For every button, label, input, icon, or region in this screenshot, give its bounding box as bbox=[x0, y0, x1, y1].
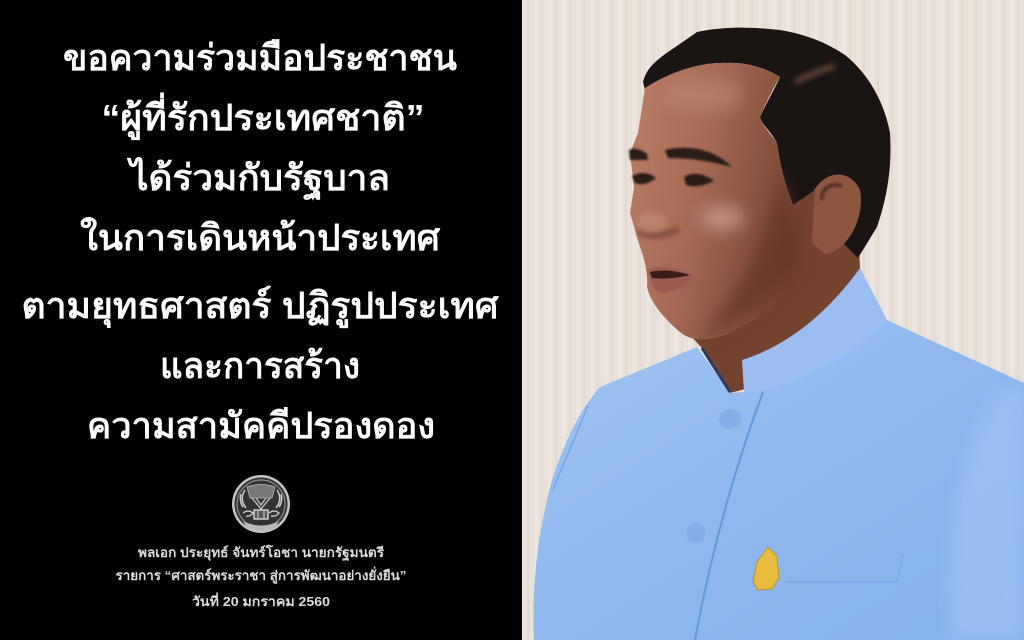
headline text: ในการเดินหน้าประเทศ bbox=[80, 216, 441, 258]
neck bbox=[690, 225, 868, 393]
headline text: และการสร้าง bbox=[160, 345, 360, 386]
ear bbox=[808, 174, 861, 254]
nose shadow bbox=[638, 230, 678, 236]
caption text: รายการ “ศาสตร์พระราชา สู่การพัฒนาอย่างยั่งยืน” bbox=[116, 566, 407, 584]
collar neck shadow line bbox=[702, 348, 730, 392]
hair bbox=[643, 28, 890, 258]
hair thin streak bbox=[795, 66, 835, 82]
headline text: “ผู้ที่รักประเทศชาติ” bbox=[102, 92, 424, 141]
icon: government emblem seal bbox=[232, 475, 290, 533]
right photo panel background bbox=[522, 0, 1024, 640]
left black panel bbox=[0, 0, 522, 640]
pocket bbox=[785, 555, 903, 582]
headline text: ความสามัคคีปรองดอง bbox=[87, 405, 435, 446]
headline text: ได้ร่วมกับรัฐบาล bbox=[126, 156, 390, 201]
gold pin badge bbox=[753, 547, 779, 590]
jacket button upper bbox=[719, 409, 741, 429]
jacket button lower bbox=[686, 523, 706, 543]
face shadow side bbox=[700, 170, 801, 340]
caption text bbox=[116, 544, 407, 609]
jacket collar bbox=[742, 268, 887, 392]
face highlight forehead bbox=[667, 79, 743, 111]
headline text: ขอความร่วมมือประชาชน bbox=[63, 37, 457, 78]
jacket side seam bbox=[553, 405, 588, 490]
ear inner shadow bbox=[822, 185, 842, 200]
face bbox=[630, 63, 815, 339]
eye right bbox=[684, 174, 714, 186]
caption text: วันที่ 20 มกราคม 2560 bbox=[192, 592, 330, 609]
headline text: ตามยุทธศาสตร์ ปฏิรูปประเทศ bbox=[22, 285, 500, 329]
eyebrow right bbox=[665, 148, 732, 167]
jacket body bbox=[534, 320, 1024, 640]
right sleeve shading bbox=[949, 383, 1024, 640]
nose tip highlight bbox=[638, 212, 666, 232]
caption text: พลเอก ประยุทธ์ จันทร์โอชา นายกรัฐมนตรี bbox=[138, 544, 384, 562]
headline text bbox=[22, 37, 500, 446]
cheek highlight bbox=[700, 206, 744, 230]
jacket placket seam bbox=[695, 392, 763, 640]
eyebrow left bbox=[629, 149, 648, 160]
eye left bbox=[632, 173, 656, 184]
portrait photo illustration bbox=[534, 28, 1024, 640]
mouth bbox=[648, 267, 693, 293]
